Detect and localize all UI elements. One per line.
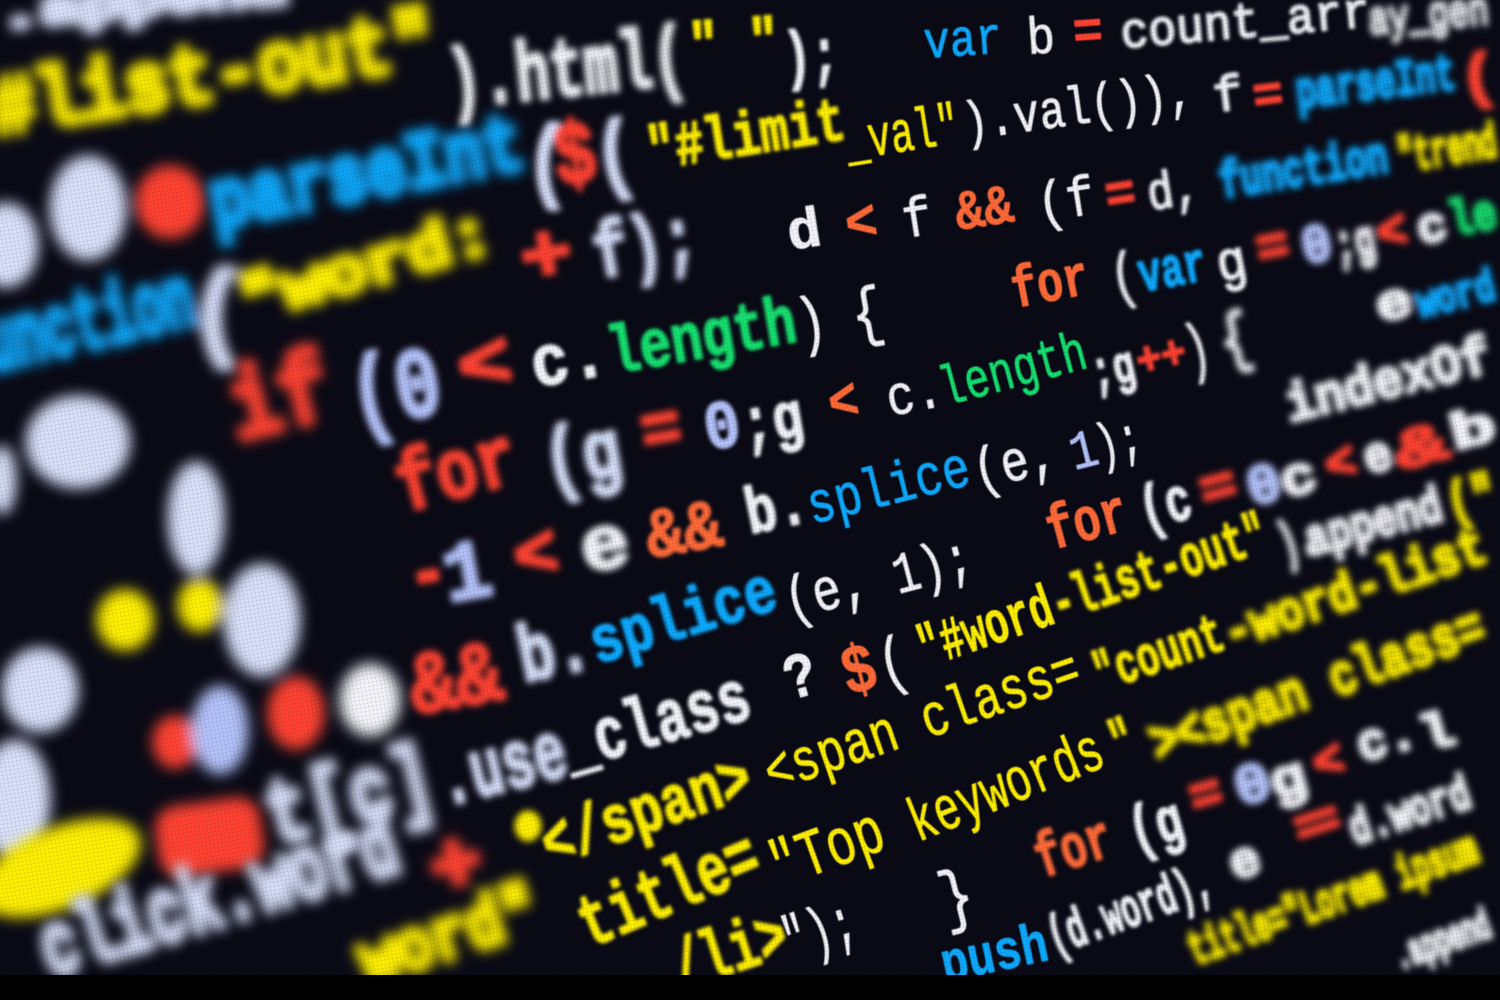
code line 5: for g = 0; g < c.length: ++ xyxy=(1131,328,1192,390)
code line 3: word key, d less than f: f xyxy=(898,187,937,255)
code line 2: parseInt and limit_val: $ xyxy=(548,108,603,212)
code line 8: use_class ternary and word-list-out: "#word xyxy=(909,576,1064,686)
code line 4: if c.length for var g: < xyxy=(1372,202,1413,266)
code line 12: push d.word xyxy=(935,767,1499,999)
code line 4: if c.length for var g: if xyxy=(218,336,343,470)
code line 10: title Top keywords: keywords xyxy=(899,717,1115,860)
code line 12: push d.word: push xyxy=(935,914,1054,999)
code line 6: b.splice(e, 1); for (c = 0: (c xyxy=(1132,466,1200,548)
code line 6: b.splice(e, 1); for (c = 0: 1 xyxy=(436,526,500,628)
code line 8: use_class ternary and word-list-out: -list-out" xyxy=(1043,504,1278,639)
code line 6: b.splice(e, 1); for (c = 0: & xyxy=(1388,411,1455,486)
code line 5: for g = 0; g < c.length: ;g xyxy=(1085,337,1142,407)
code line 3: word key, d less than f: d, xyxy=(1143,159,1204,226)
code line 4: if c.length for var g: (0 xyxy=(341,331,451,459)
code line 2: parseInt and limit_val: f xyxy=(1210,68,1247,128)
code line 6: b.splice(e, 1); for (c = 0: - xyxy=(401,528,456,625)
code line 6: b.splice(e, 1); for (c = 0: (e, xyxy=(967,424,1064,507)
code line 5: for g = 0; g < c.length: c. xyxy=(881,359,948,433)
code line 10: title Top keywords: + xyxy=(422,817,493,919)
code line 8: use_class ternary and word-list-out xyxy=(0,462,1500,872)
code line 7: && b.splice(e, 1); xyxy=(402,528,980,741)
code line 6: b.splice(e, 1); for (c = 0: c xyxy=(1274,446,1324,514)
code line 3: word key, d less than f: function xyxy=(1215,129,1392,214)
code line 4: if c.length for var g: g xyxy=(1211,230,1253,299)
code line 9: closing span and span class: <span class= xyxy=(756,638,1090,810)
code line 5: for g = 0; g < c.length: ) xyxy=(1178,313,1218,391)
code line 4: if c.length for var g: c. xyxy=(525,315,614,409)
code line 4: if c.length for var g: < xyxy=(451,321,519,415)
code line 4: if c.length for var g: ( xyxy=(1105,242,1144,317)
code line 3: word key, d less than f: = xyxy=(1101,165,1140,228)
code line 11: closing li, for loop: "); xyxy=(774,890,867,981)
code line 9: closing span and span class: "count xyxy=(1085,604,1233,708)
code line 5: for g = 0; g < c.length: 0 xyxy=(698,389,747,471)
code line 8: use_class ternary and word-list-out: ). xyxy=(1271,507,1324,578)
code line 12: push d.word: e xyxy=(1222,832,1268,895)
code line 2: parseInt and limit_val: parseInt xyxy=(202,101,532,253)
code line 3: word key, d less than f: (f xyxy=(1033,167,1100,239)
code line 7: && b.splice(e, 1);: splice xyxy=(581,555,786,683)
code line 6: b.splice(e, 1); for (c = 0: b xyxy=(1444,399,1500,465)
code line 11: closing li, for loop: = xyxy=(1183,764,1230,831)
code line 2: parseInt and limit_val: ( xyxy=(588,108,643,212)
code line 7: && b.splice(e, 1);: (e, xyxy=(777,551,877,638)
code line 11: closing li, for loop: (g xyxy=(1121,787,1192,871)
code line 10: title Top keywords xyxy=(0,597,1495,1000)
code line 3: word key, d less than f xyxy=(0,116,1500,398)
code line 12: push d.word: (d.word), xyxy=(1039,852,1222,971)
code line 6: b.splice(e, 1); for (c = 0: splice xyxy=(801,438,977,541)
code line 9: closing span and span class xyxy=(515,519,1496,886)
code line 7: && b.splice(e, 1);: 1); xyxy=(886,528,980,611)
code line 11: closing li, for loop: l xyxy=(1414,703,1462,767)
code line 7: && b.splice(e, 1);: && xyxy=(402,627,510,741)
code line 5: for g = 0; g < c.length: for xyxy=(386,414,529,537)
code line 5: for g = 0; g < c.length xyxy=(386,262,1500,537)
code line 2: parseInt and limit_val: ( xyxy=(1456,45,1500,117)
code line 8: use_class ternary and word-list-out: ( xyxy=(870,625,918,705)
code line 5: for g = 0; g < c.length: length xyxy=(933,322,1094,422)
code line 5: for g = 0; g < c.length: = xyxy=(635,391,688,476)
code line 1: html call and var b: = xyxy=(1071,3,1105,64)
code line 6: b.splice(e, 1); for (c = 0: && xyxy=(640,489,729,580)
code line 5: for g = 0; g < c.length: ;g xyxy=(735,381,810,466)
code line 5: for g = 0; g < c.length: { xyxy=(1213,302,1259,381)
code line 11: closing li, for loop: for xyxy=(1026,804,1122,896)
code line 6: b.splice(e, 1); for (c = 0: ); xyxy=(1089,407,1149,480)
code line 4: if c.length for var g: = xyxy=(1252,217,1295,283)
code line 10: title Top keywords: title= xyxy=(566,818,774,969)
code line 10: title Top keywords: "Top xyxy=(759,796,896,907)
code line 11: closing li, for loop: < xyxy=(1307,732,1351,795)
code line 3: word key, d less than f: && xyxy=(951,174,1018,247)
code line 1: html call and var b xyxy=(0,0,1491,161)
code line 4: if c.length for var g: for xyxy=(1006,247,1095,326)
code line 3: word key, d less than f: + xyxy=(514,210,581,309)
code line 6: b.splice(e, 1); for (c = 0: b. xyxy=(739,467,815,554)
code line 5: for g = 0; g < c.length: e xyxy=(1370,274,1419,338)
code line 2: parseInt and limit_val: "#limit xyxy=(642,87,851,189)
code line 11: closing li, for loop xyxy=(662,703,1462,1000)
code line 4: if c.length for var g: ) xyxy=(790,286,833,365)
code line 4: if c.length for var g xyxy=(0,187,1500,514)
code line 8: use_class ternary and word-list-out: $ xyxy=(834,632,886,715)
code line 6: b.splice(e, 1); for (c = 0: e xyxy=(1357,427,1399,489)
code line 10: title Top keywords: " xyxy=(1100,709,1147,779)
code line 10: title Top keywords: click.word xyxy=(27,796,412,1000)
code line 1: html call and var b: ).html( xyxy=(443,14,691,134)
code line 3: word key, d less than f: "word: xyxy=(231,200,502,341)
bottom black bar xyxy=(0,975,1500,1000)
code line 4: if c.length for var g: ;g xyxy=(1330,212,1380,278)
code line 4: if c.length for var g: var xyxy=(1133,233,1212,309)
code line 6: b.splice(e, 1); for (c = 0 xyxy=(401,399,1500,628)
code line 2: parseInt and limit_val: ( xyxy=(525,113,570,218)
code line 8: use_class ternary and word-list-out: ? xyxy=(777,641,826,719)
code line 1: html call and var b: var xyxy=(922,10,1004,74)
code line 8: use_class ternary and word-list-out: .use xyxy=(429,709,577,830)
code line 6: b.splice(e, 1); for (c = 0: e xyxy=(574,502,636,595)
code line 1: html call and var b: ); xyxy=(781,19,841,98)
code line 4: if c.length for var g: c xyxy=(1412,198,1453,260)
code line 11: closing li, for loop: c. xyxy=(1350,704,1424,777)
code line 2: parseInt and limit_val: ).val()), xyxy=(959,64,1197,157)
code line 4: if c.length for var g: 0 xyxy=(1297,215,1338,281)
code line 9: closing span and span class: </span> xyxy=(532,742,763,886)
code line 2: parseInt and limit_val xyxy=(0,45,1500,287)
code line 11: closing li, for loop: g xyxy=(1263,748,1314,816)
code line 3: word key, d less than f: < xyxy=(841,191,882,259)
code line 4: if c.length for var g: { xyxy=(845,276,890,356)
code line 6: b.splice(e, 1); for (c = 0: = xyxy=(1194,456,1244,524)
code line 6: b.splice(e, 1); for (c = 0: 1 xyxy=(1063,421,1105,486)
code line 8: use_class ternary and word-list-out: t[c] xyxy=(255,729,446,872)
code line 12: push d.word: = xyxy=(1287,792,1349,860)
code line 7: && b.splice(e, 1);: b. xyxy=(510,602,600,706)
code line 6: b.splice(e, 1); for (c = 0: < xyxy=(1319,435,1363,497)
code line 5: for g = 0; g < c.length: < xyxy=(823,370,865,440)
code line 6: b.splice(e, 1); for (c = 0: for xyxy=(1039,479,1136,568)
code line 3: word key, d less than f: d xyxy=(783,198,826,267)
code line 4: if c.length for var g: length xyxy=(602,286,803,395)
code line 2: parseInt and limit_val: = xyxy=(1250,68,1287,128)
code line 5: for g = 0; g < c.length: (g xyxy=(536,407,629,514)
code line 3: word key, d less than f: ( xyxy=(188,258,248,377)
code line 2: parseInt and limit_val: _val" xyxy=(840,96,964,178)
code line 6: b.splice(e, 1); for (c = 0: < xyxy=(508,513,565,602)
code line 3: word key, d less than f: f); xyxy=(587,197,705,302)
code line 8: use_class ternary and word-list-out: append xyxy=(1299,478,1449,571)
code line 11: closing li, for loop: 0 xyxy=(1227,751,1279,822)
code line 11: closing li, for loop: } xyxy=(931,858,983,943)
code line 8: use_class ternary and word-list-out: _class xyxy=(552,658,761,792)
code line 6: b.splice(e, 1); for (c = 0: 0 xyxy=(1240,452,1289,522)
code line 1: html call and var b: b xyxy=(1025,9,1057,70)
code line 1: html call and var b: " " xyxy=(687,9,781,79)
